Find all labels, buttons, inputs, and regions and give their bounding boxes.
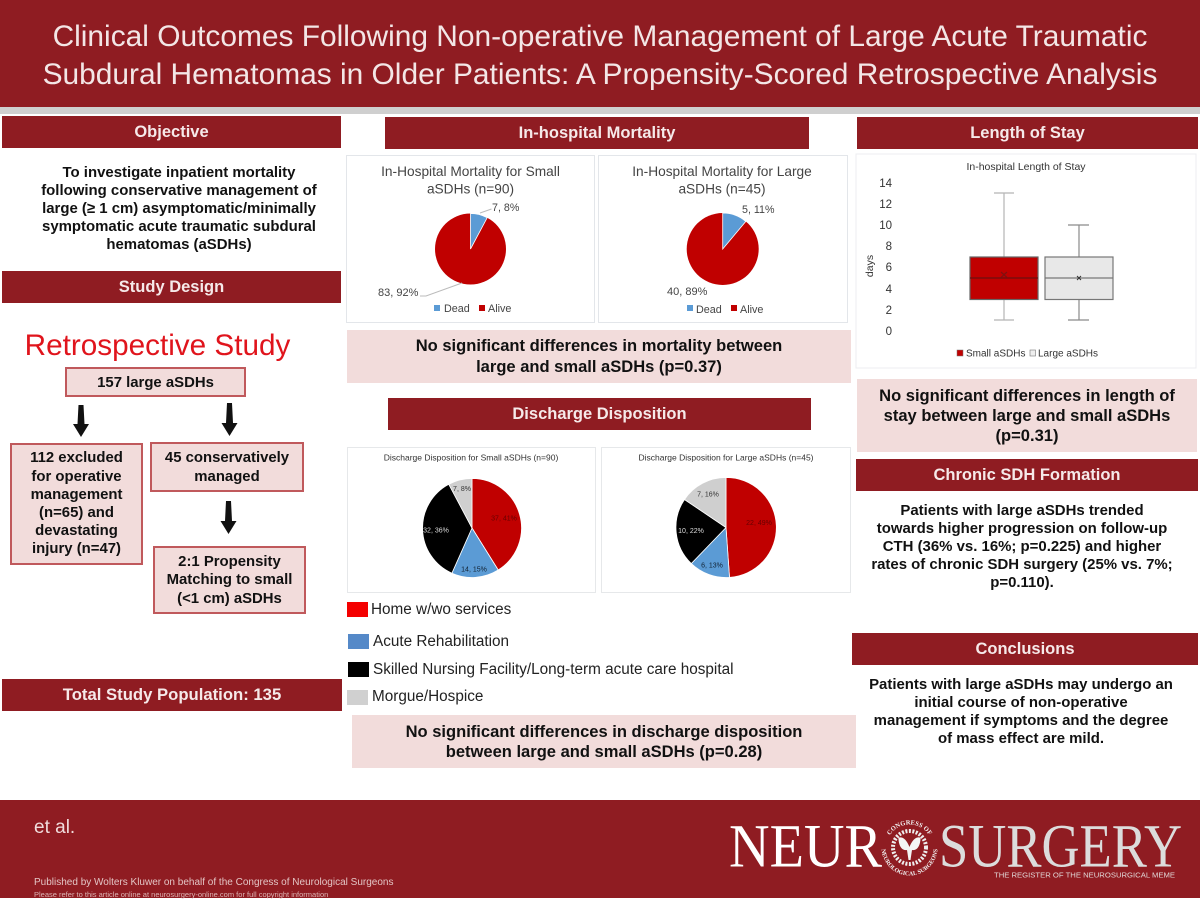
legend label: skilled nursing: Skilled Nursing Facility/Long-term acute care hospital [373, 661, 734, 678]
text: objective: large (≥ 1 cm) asymptomatic/minimally [42, 200, 316, 217]
legend swatch: morgue [347, 690, 368, 705]
arrow: to excluded [73, 405, 89, 437]
heading: objective [2, 116, 341, 148]
flow box: 45 conservatively managed: 45 conservatively [165, 450, 289, 466]
chart: in-hospital length of stay box plot: days [864, 255, 876, 277]
flow box: 112 excluded: (n=65) and [39, 505, 114, 521]
chart: mortality small aSDHs: aSDHs (n=90) [427, 182, 514, 196]
chart: mortality small aSDHs: Dead [444, 303, 470, 315]
callout: discharge result: No significant differences in discharge disposition [406, 722, 802, 740]
legend label: home: Home w/wo services [371, 601, 511, 618]
text: conclusions: Patients with large aSDHs may undergo an [869, 676, 1173, 693]
callout: discharge result [352, 715, 856, 768]
legend swatch: home [347, 602, 368, 617]
callout: mortality result: large and small aSDHs (p=0.37) [476, 356, 722, 376]
heading: conclusions [852, 633, 1198, 665]
chart: mortality small aSDHs: Alive [488, 303, 511, 315]
chart: discharge disposition small aSDHs: 7, 8% [453, 486, 471, 493]
chart: in-hospital length of stay box plot: Small aSDHs [966, 348, 1025, 360]
heading: conclusions: Conclusions [975, 640, 1074, 658]
chart: mortality large aSDHs: 5, 11% [742, 204, 775, 216]
chart: mortality large aSDHs: Alive [740, 304, 763, 316]
chart: in-hospital length of stay box plot: 6 [886, 262, 892, 274]
callout: length of stay result: stay between large and small aSDHs [884, 406, 1170, 424]
flow box: 112 excluded: management [31, 487, 122, 503]
heading: objective: Objective [134, 122, 209, 140]
panel: objective [2, 116, 341, 253]
heading: length of stay: Length of Stay [970, 124, 1085, 142]
text: chronic SDH formation: CTH (36% vs. 16%; p=0.225) and higher [883, 538, 1161, 555]
legend label: morgue: Morgue/Hospice [372, 688, 483, 705]
logo: Neurosurgery wordmark: NEUROLOGICAL SURGEONS [882, 848, 938, 876]
author line: et al. [34, 817, 75, 838]
callout: mortality result: No significant differences in mortality between [416, 336, 782, 355]
logo: Neurosurgery wordmark: THE REGISTER OF THE NEUROSURGICAL MEME [994, 870, 1175, 880]
flow box: 45 conservatively managed: managed [194, 468, 260, 484]
arrow: to conservatively managed [222, 403, 238, 436]
text: chronic SDH formation: rates of chronic SDH surgery (25% vs. 7%; [871, 556, 1173, 573]
flow box: 45 conservatively managed [150, 442, 304, 492]
heading: chronic SDH formation: Chronic SDH Formation [933, 466, 1120, 484]
text: objective: To investigate inpatient mortality [63, 164, 295, 181]
flow box: 112 excluded [10, 443, 143, 565]
heading: in-hospital mortality: In-hospital Mortality [519, 124, 675, 142]
publisher note: Published by Wolters Kluwer on behalf of the Congress of Neurological Surgeons [34, 877, 393, 888]
header banner with title: Subdural Hematomas in Older Patients: A Propensity-Scored Retrospective Analysis [43, 58, 1157, 91]
text: objective: symptomatic acute traumatic subdural [42, 218, 316, 235]
heading: in-hospital mortality [385, 117, 809, 149]
heading: study design: Study Design [119, 278, 224, 296]
chart: discharge disposition large aSDHs: 10, 22% [678, 528, 704, 535]
callout: length of stay result: (p=0.31) [996, 426, 1058, 444]
text: chronic SDH formation: Patients with large aSDHs trended [900, 502, 1144, 519]
chart: mortality large aSDHs: Dead [696, 304, 722, 316]
chart: mortality small aSDHs [346, 155, 595, 323]
callout: discharge result: between large and small aSDHs (p=0.28) [446, 742, 762, 761]
chart: in-hospital length of stay box plot: Large aSDHs [1038, 348, 1098, 360]
logo: Neurosurgery wordmark [729, 814, 1182, 880]
flow box: propensity matching: Matching to small [167, 572, 292, 588]
flow box: 157 large aSDHs: 157 large aSDHs [97, 375, 214, 391]
arrow: to propensity matching [220, 501, 236, 534]
chart: mortality large aSDHs: In-Hospital Mortality for Large [632, 164, 812, 179]
footer band [0, 800, 1200, 898]
chart: in-hospital length of stay box plot: 0 [886, 326, 892, 338]
chart: discharge disposition large aSDHs: Discharge Disposition for Large aSDHs (n=45) [638, 452, 814, 462]
legend: discharge disposition [347, 601, 734, 705]
text: conclusions: management if symptoms and the degree [874, 712, 1168, 729]
chart: in-hospital length of stay box plot: 4 [886, 284, 893, 296]
chart: in-hospital length of stay box plot: 14 [879, 178, 893, 190]
text: chronic SDH formation: towards higher progression on follow-up [877, 520, 1167, 537]
heading: discharge disposition [388, 398, 811, 430]
chart: discharge disposition small aSDHs: 32, 36% [423, 528, 449, 534]
text: objective: hematomas (aSDHs) [106, 236, 252, 253]
text: conclusions: initial course of non-operative [914, 694, 1128, 711]
chart: in-hospital length of stay box plot: In-hospital Length of Stay [966, 161, 1086, 173]
legend label: rehabilitation: Acute Rehabilitation [373, 633, 509, 650]
panel: study design [2, 271, 341, 614]
chart: mortality small aSDHs: In-Hospital Mortality for Small [381, 164, 560, 179]
text: chronic SDH formation [871, 502, 1173, 591]
logo: Neurosurgery wordmark: NEUR [729, 814, 882, 880]
copyright note: Please refer to this article online at neurosurgery-online.com for full copyright information [34, 890, 328, 898]
chart: discharge disposition small aSDHs [347, 447, 596, 593]
chart: mortality small aSDHs: 7, 8% [492, 202, 520, 214]
logo: Neurosurgery wordmark: CONGRESS OF [887, 820, 932, 834]
chart: discharge disposition large aSDHs: 7, 16% [697, 492, 719, 498]
text: conclusions: of mass effect are mild. [938, 730, 1104, 747]
flow box: 112 excluded: for operative [31, 469, 122, 485]
chart: in-hospital length of stay box plot: 10 [879, 220, 892, 232]
chart: discharge disposition small aSDHs: 14, 15% [461, 566, 487, 574]
chart: mortality small aSDHs: 83, 92% [378, 287, 419, 299]
chart: discharge disposition large aSDHs: 6, 13% [701, 562, 723, 570]
banner: total study population: Total Study Population: 135 [63, 685, 281, 704]
flow box: 112 excluded: 112 excluded [30, 450, 123, 466]
chart: discharge disposition small aSDHs: Discharge Disposition for Small aSDHs (n=90) [384, 452, 558, 462]
chart: in-hospital length of stay box plot [856, 154, 1196, 368]
flow box: 112 excluded: devastating [35, 523, 118, 539]
chart: discharge disposition small aSDHs: 37, 41% [491, 516, 517, 522]
heading: chronic SDH formation [856, 459, 1198, 491]
flow box: 157 large aSDHs [65, 367, 246, 397]
chart: in-hospital length of stay box plot: 12 [879, 199, 892, 211]
legend swatch: rehabilitation [348, 634, 369, 649]
header banner with title: Clinical Outcomes Following Non-operative Management of Large Acute Traumatic [53, 20, 1147, 53]
text: chronic SDH formation: p=0.110). [990, 574, 1054, 591]
flow box: 112 excluded: injury (n=47) [32, 541, 121, 557]
chart: discharge disposition large aSDHs: 22, 49% [746, 520, 772, 527]
chart: mortality large aSDHs: aSDHs (n=45) [678, 182, 766, 196]
chart: mortality large aSDHs [598, 155, 848, 323]
callout: mortality result [347, 330, 851, 383]
chart: in-hospital length of stay box plot: 8 [886, 241, 892, 253]
legend swatch: skilled nursing [348, 662, 369, 677]
banner: total study population [2, 679, 342, 711]
chart: mortality large aSDHs: 40, 89% [667, 286, 708, 298]
text: conclusions [869, 676, 1173, 747]
flow box: propensity matching: (<1 cm) aSDHs [177, 591, 282, 607]
chart: discharge disposition large aSDHs [601, 447, 851, 593]
chart: in-hospital length of stay box plot: 2 [886, 305, 892, 317]
heading: retrospective study: Retrospective Study [25, 329, 290, 362]
header banner with title [0, 0, 1200, 107]
text: objective: following conservative management of [41, 182, 317, 199]
heading: study design [2, 271, 341, 303]
text: objective [41, 164, 317, 253]
callout: length of stay result: No significant differences in length of [879, 386, 1175, 404]
heading: discharge disposition: Discharge Disposition [512, 404, 687, 422]
flow box: propensity matching [153, 546, 306, 614]
callout: length of stay result [857, 379, 1197, 452]
heading: length of stay [857, 117, 1198, 149]
flow box: propensity matching: 2:1 Propensity [178, 554, 281, 570]
